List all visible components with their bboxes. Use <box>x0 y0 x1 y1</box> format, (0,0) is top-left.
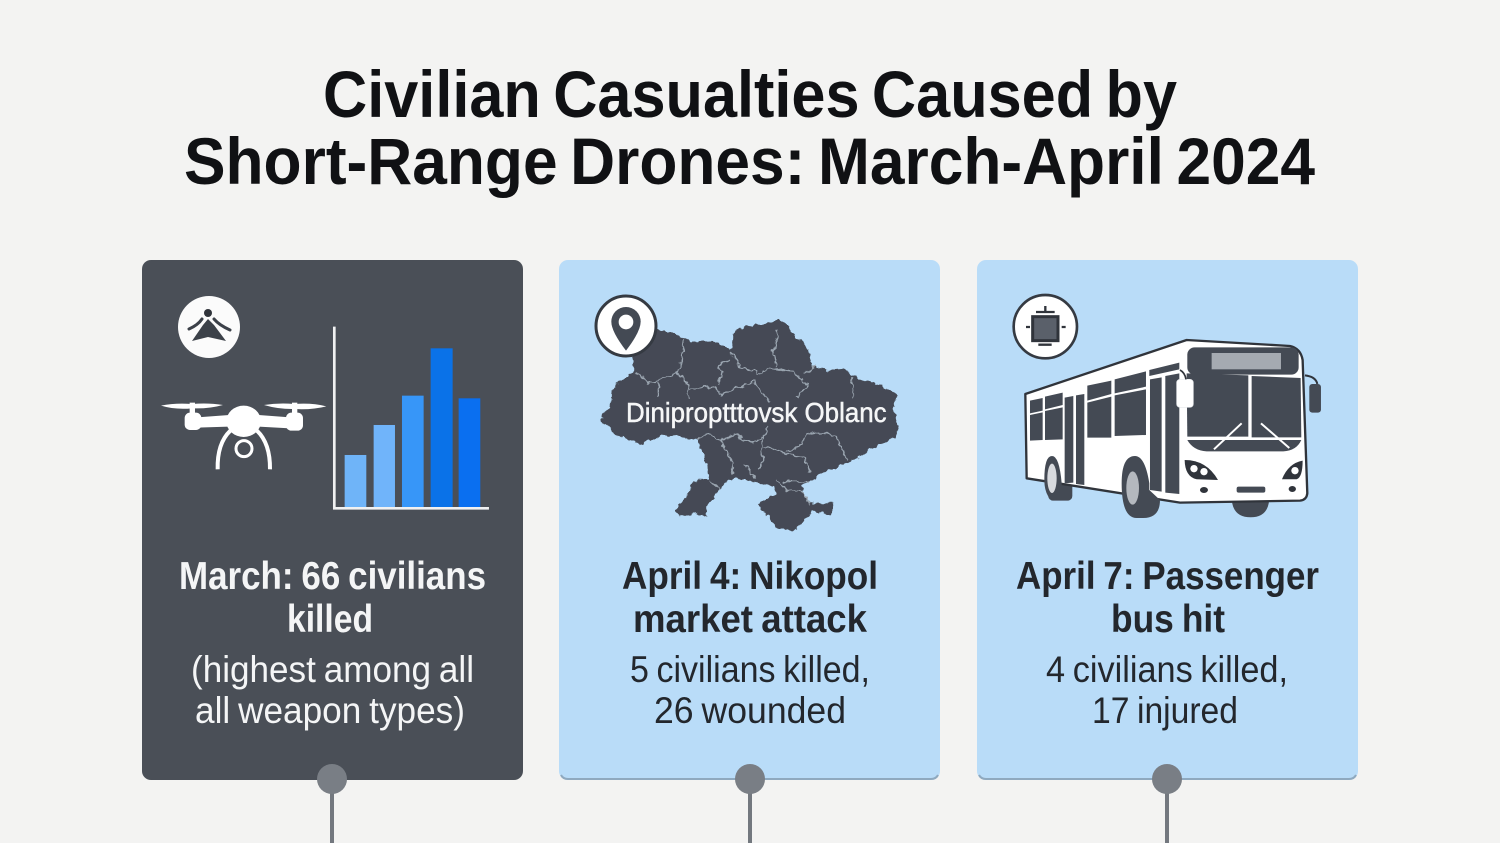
panel text: March: all weapon types) <box>195 690 465 731</box>
bar chart <box>334 327 489 508</box>
timeline marker: March <box>317 764 347 843</box>
icon: location pin <box>596 296 656 356</box>
panel text: bus: 4 civilians killed, <box>1046 649 1288 690</box>
panel text: bus: bus hit <box>1111 598 1225 641</box>
panel text: March: killed <box>287 598 373 641</box>
panel text: Nikopol: market attack <box>633 598 867 641</box>
panel text: bus: 17 injured <box>1092 690 1238 731</box>
panel: Nikopol market attack <box>559 260 940 780</box>
panel text: March: March: 66 civilians <box>179 555 486 598</box>
timeline marker: April 4 <box>735 764 765 843</box>
icon: bus badge <box>1014 295 1077 358</box>
panel: March drone deaths <box>142 260 523 780</box>
panel text: Nikopol: April 4: Nikopol <box>622 555 878 598</box>
timeline marker: April 7 <box>1152 764 1182 843</box>
title <box>184 57 1315 198</box>
icon: bus <box>1025 340 1321 518</box>
map: Ukraine oblasts <box>600 320 898 532</box>
map label: Diniproptttovsk Oblanc <box>626 397 887 428</box>
panel text: March <box>179 555 486 731</box>
panel text: Nikopol <box>622 555 878 731</box>
panel text: bus <box>1016 555 1319 731</box>
title: Short-Range Drones: March-April 2024 <box>184 124 1315 198</box>
panel text: bus: April 7: Passenger <box>1016 555 1319 598</box>
panel text: Nikopol: 5 civilians killed, <box>630 649 870 690</box>
icon: drone <box>161 403 326 469</box>
title: Civilian Casualties Caused by <box>323 57 1177 131</box>
panel: passenger bus hit <box>977 260 1358 780</box>
panel text: March: (highest among all <box>191 649 474 690</box>
panel text: Nikopol: 26 wounded <box>654 690 846 731</box>
icon: drone operator badge <box>178 296 240 358</box>
